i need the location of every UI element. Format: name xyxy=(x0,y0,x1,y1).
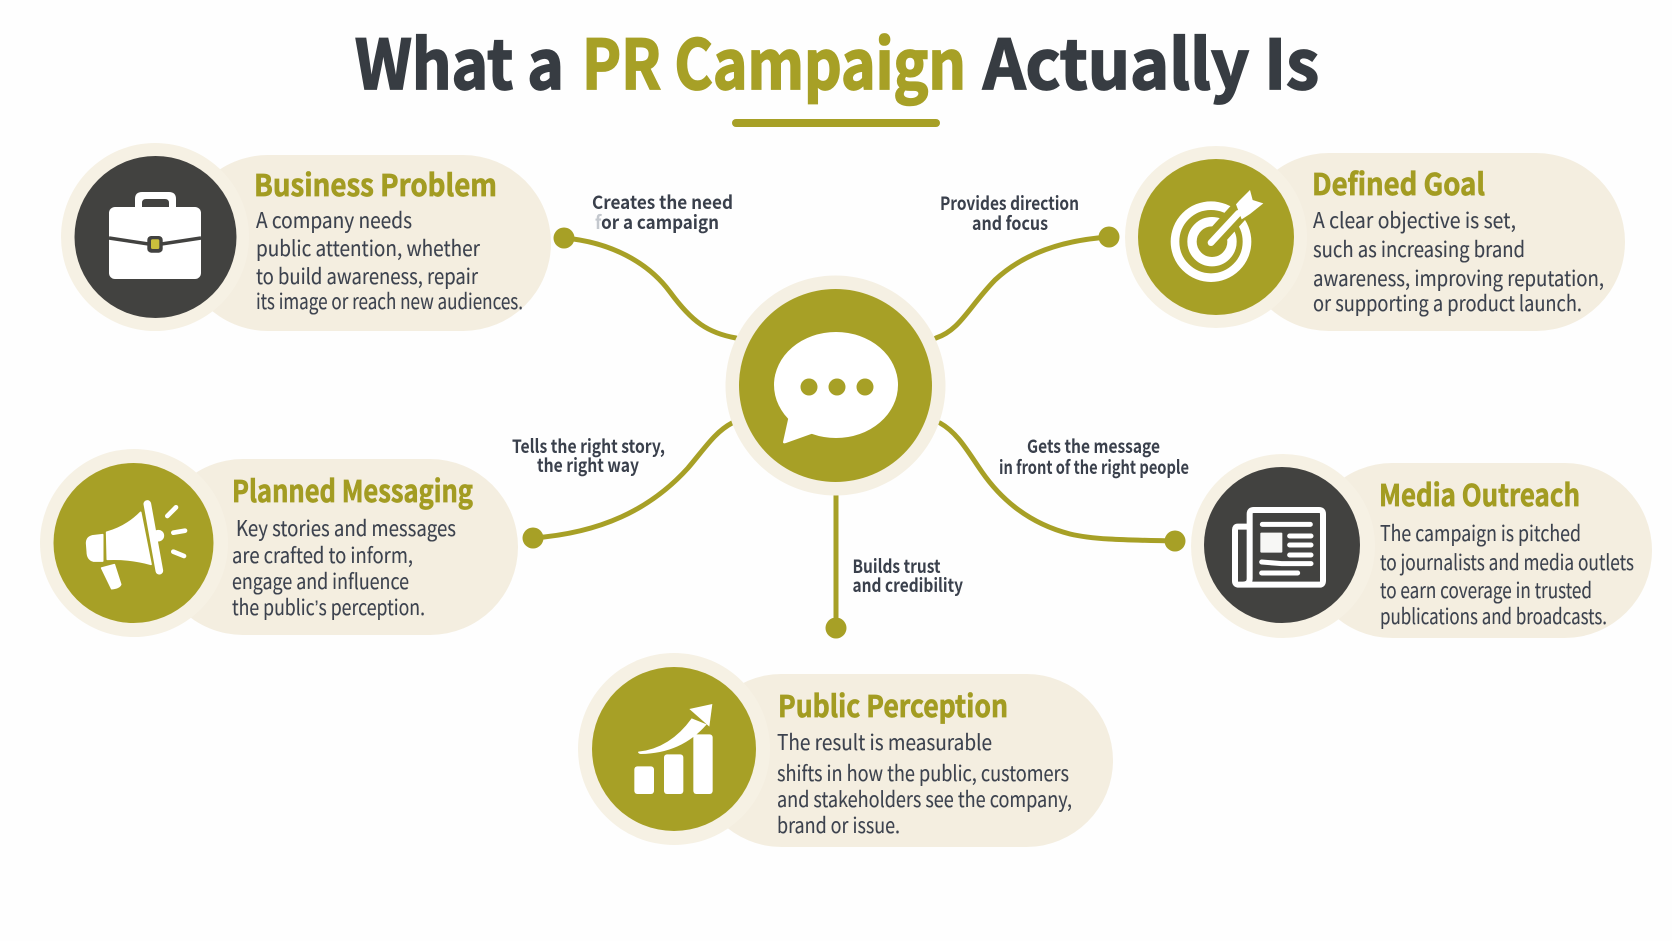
connector: defined goal xyxy=(936,226,1120,338)
body text: The result is measurable xyxy=(777,726,992,757)
body text: publications and broadcasts. xyxy=(1380,600,1607,631)
connector: business problem xyxy=(554,228,736,338)
body text: to earn coverage in trusted xyxy=(1380,574,1592,605)
label: tells the right story: the right way xyxy=(537,452,639,478)
body text: and stakeholders see the company, xyxy=(777,783,1072,814)
body text: such as increasing brand xyxy=(1313,233,1525,264)
icon: target with arrow xyxy=(1175,190,1263,278)
body text: brand or issue. xyxy=(777,809,900,840)
label: creates the need xyxy=(592,189,733,235)
label: gets the message: in front of the right people xyxy=(999,454,1189,480)
heading: Planned Messaging xyxy=(232,467,473,511)
body text: its image or reach new audiences. xyxy=(256,285,523,316)
title: What a xyxy=(355,10,564,109)
label: gets the message xyxy=(999,433,1189,480)
body text xyxy=(232,512,456,622)
body text: Key stories and messages xyxy=(236,512,456,543)
connector: media outreach xyxy=(940,423,1186,552)
body text: are crafted to inform, xyxy=(232,539,413,570)
panel: business problem xyxy=(61,143,551,331)
label: tells the right story xyxy=(512,433,665,478)
connector: public perception xyxy=(826,490,846,638)
label: creates the need: Creates the need xyxy=(592,189,733,215)
icon: newspaper xyxy=(1235,510,1323,585)
body text: A clear objective is set, xyxy=(1313,204,1516,235)
body text: shifts in how the public, customers xyxy=(777,757,1069,788)
panel: media outreach xyxy=(1191,454,1652,638)
body text: public attention, whether xyxy=(256,232,481,263)
body text: the public’s perception. xyxy=(232,591,425,622)
heading: Media Outreach xyxy=(1379,471,1580,515)
icon: megaphone xyxy=(87,504,185,589)
body text: The campaign is pitched xyxy=(1380,517,1581,548)
title: Actually Is xyxy=(982,10,1319,109)
label: builds trust: and credibility xyxy=(852,572,963,598)
title xyxy=(355,10,1319,109)
heading: Business Problem xyxy=(254,161,497,205)
central hub xyxy=(726,276,946,496)
body text xyxy=(1313,204,1604,318)
icon: rising bar chart xyxy=(634,704,713,794)
connector: planned messaging xyxy=(522,423,732,548)
title underline xyxy=(732,119,940,127)
panel: planned messaging xyxy=(40,449,518,637)
icon: briefcase xyxy=(109,192,201,279)
label: provides direction: Provides direction xyxy=(940,190,1079,216)
label: tells the right story: Tells the right story, xyxy=(512,433,665,459)
body text: A company needs xyxy=(256,204,412,235)
heading: Defined Goal xyxy=(1312,160,1485,204)
title: PR Campaign xyxy=(582,10,966,109)
body text: to build awareness, repair xyxy=(256,260,479,291)
body text xyxy=(777,726,1072,840)
label: creates the need: for a campaign xyxy=(595,209,719,235)
label: gets the message: Gets the message xyxy=(1027,433,1160,459)
label: builds trust: Builds trust xyxy=(852,553,941,579)
panel: public perception xyxy=(578,653,1113,847)
label: builds trust xyxy=(852,553,963,598)
body text xyxy=(1380,517,1634,631)
icon: speech bubble xyxy=(774,332,898,443)
body text xyxy=(256,204,523,316)
label: provides direction: and focus xyxy=(972,210,1048,236)
panel: defined goal xyxy=(1125,146,1625,331)
body text: or supporting a product launch. xyxy=(1313,287,1582,318)
body text: awareness, improving reputation, xyxy=(1313,262,1604,293)
heading: Public Perception xyxy=(778,682,1008,726)
label: provides direction xyxy=(940,190,1079,236)
body text: engage and influence xyxy=(232,565,409,596)
